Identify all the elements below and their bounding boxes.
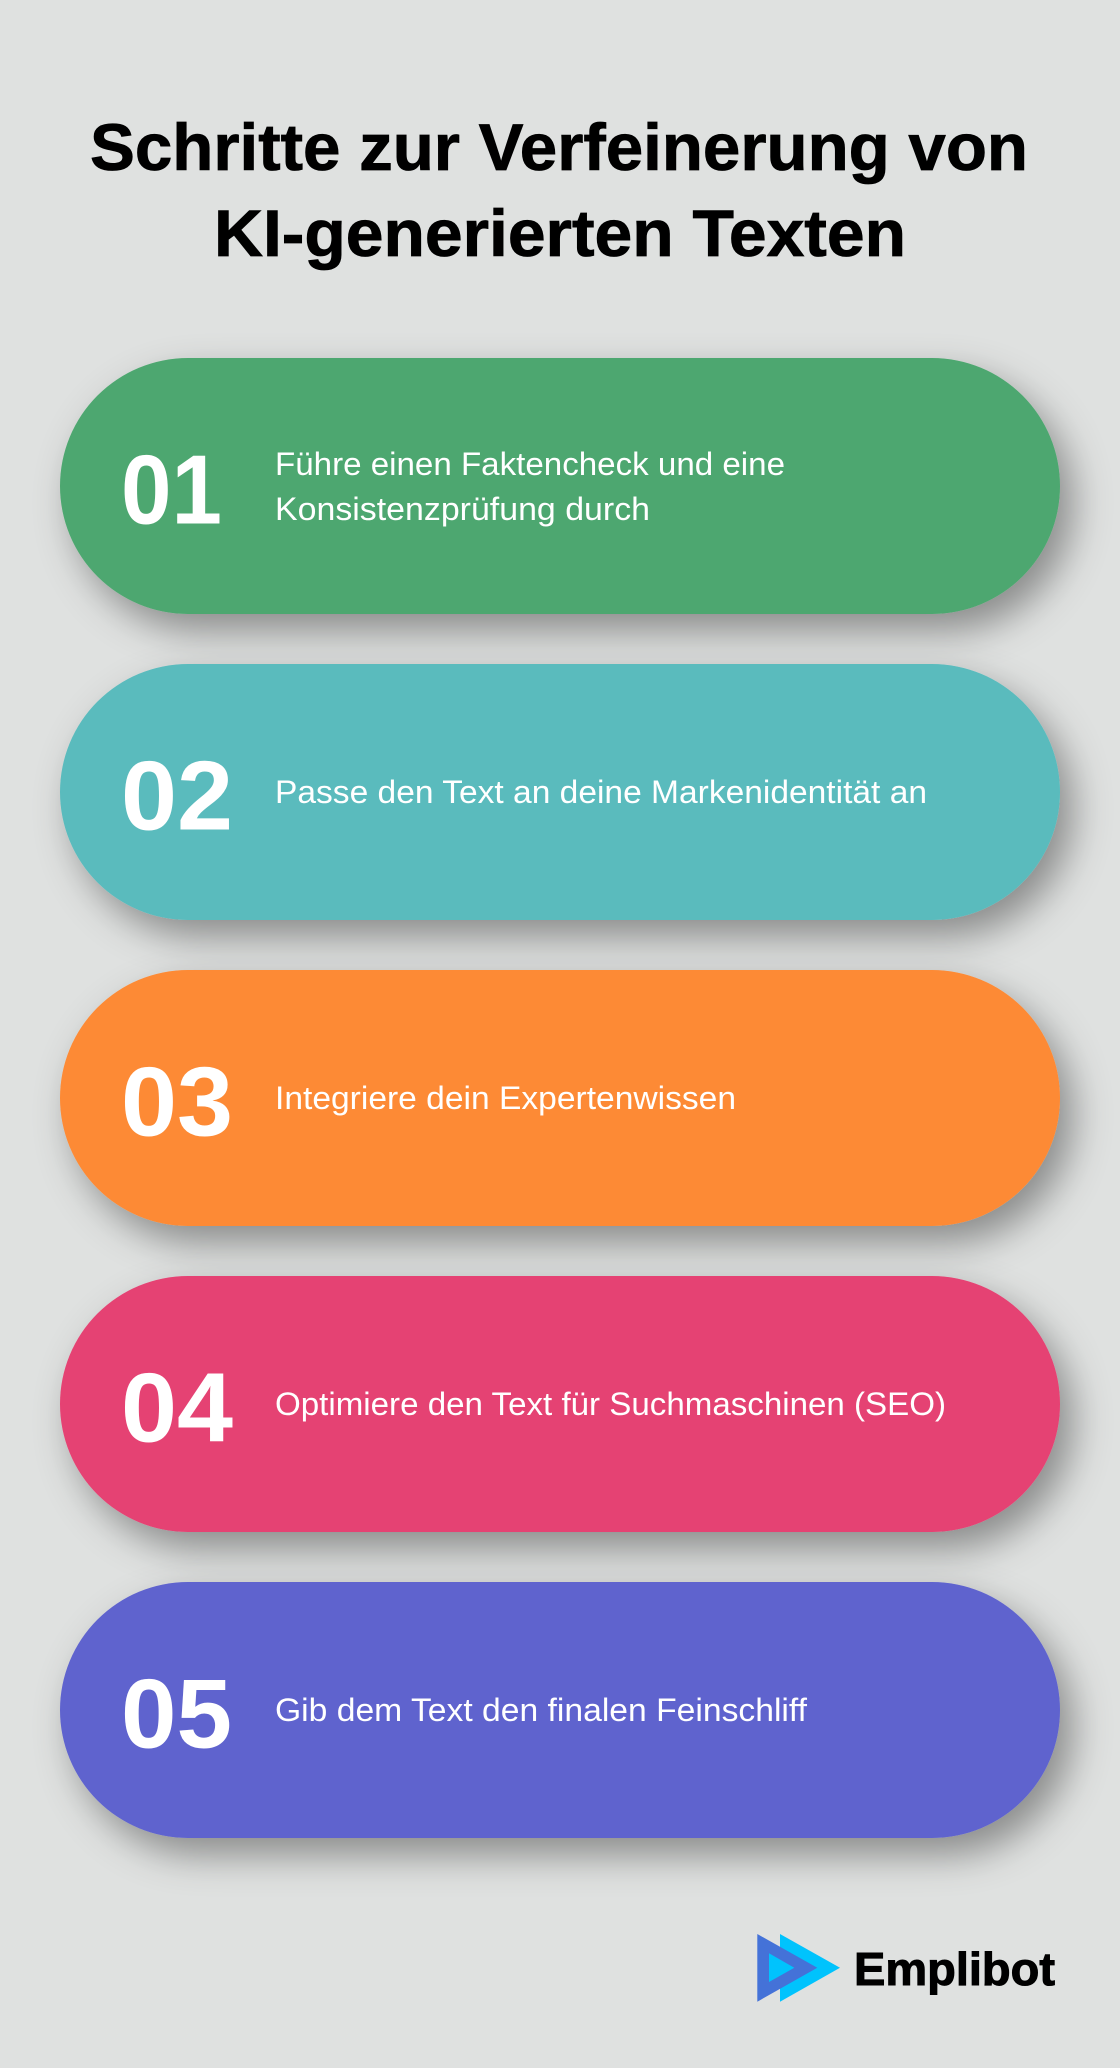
number 03: 03 [121,1046,233,1156]
pill background purple [60,1582,1060,1838]
title [90,110,1028,270]
text step 03: Integriere dein Expertenwissen [275,1080,736,1116]
pill background teal [60,664,1060,920]
number 05: 05 [121,1658,232,1768]
text step 01 [275,446,785,527]
number 01: 01 [121,434,222,544]
number 02: 02 [121,740,233,850]
pill background pink [60,1276,1060,1532]
title: KI-generierten Texten [214,196,906,270]
text step 01: Führe einen Faktencheck und eine [275,446,785,482]
text step 02: Passe den Text an deine Markenidentität an [275,774,927,810]
panel: step 04 [60,1276,1060,1532]
pill background green [60,358,1060,614]
icon: play triangles [757,1934,840,2002]
text step 01: Konsistenzprüfung durch [275,491,650,527]
title: Schritte zur Verfeinerung von [90,110,1028,184]
panel: step 01 [60,358,1060,614]
panel: step 02 [60,664,1060,920]
logo: Emplibot [757,1934,1055,2002]
text step 05: Gib dem Text den finalen Feinschliff [275,1692,807,1728]
panel: step 05 [60,1582,1060,1838]
panel: step 03 [60,970,1060,1226]
wordmark: Emplibot [854,1943,1055,1995]
text step 04: Optimiere den Text für Suchmaschinen (SEO) [275,1386,946,1422]
pill background orange [60,970,1060,1226]
number 04: 04 [121,1352,233,1462]
